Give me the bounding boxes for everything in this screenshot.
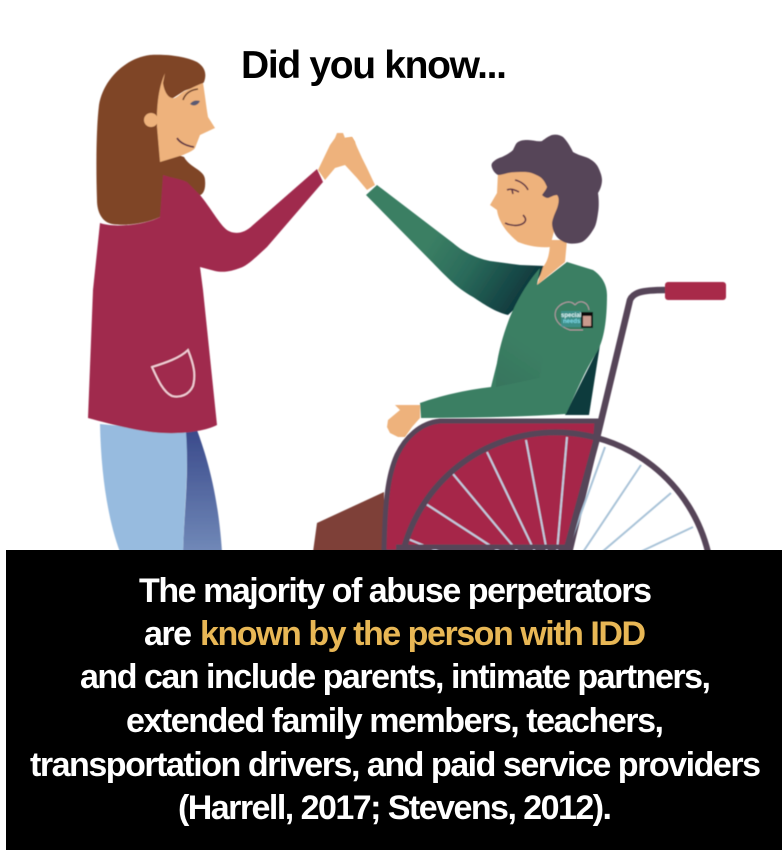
woman hand — [318, 133, 355, 180]
man raised hand — [338, 137, 375, 190]
handle — [665, 282, 726, 300]
illustration: woman — [88, 55, 355, 552]
man ear — [549, 195, 563, 209]
wheel spokes — [408, 437, 693, 552]
body text line 2: are — [144, 615, 192, 653]
citation line: (Harrell, 2017; Stevens, 2012). — [178, 789, 612, 827]
man facial features — [505, 180, 528, 225]
body text line 2 — [144, 615, 646, 653]
woman trousers — [100, 424, 222, 552]
illustration: wheelchair — [313, 282, 726, 552]
man head — [490, 172, 562, 247]
man arm crease — [496, 317, 545, 387]
man hair — [492, 135, 602, 244]
woman pocket — [152, 350, 194, 397]
illustration: man — [338, 135, 607, 437]
man neck — [537, 240, 567, 285]
wheel rim — [403, 432, 708, 552]
logo badge — [555, 302, 593, 330]
woman sweater — [88, 169, 323, 433]
seat — [384, 421, 597, 552]
man torso — [420, 262, 607, 418]
man lower hand — [387, 405, 420, 437]
highlighted phrase: known by the person with IDD — [200, 615, 646, 653]
body text line 5: transportation drivers, and paid service providers — [30, 746, 761, 784]
woman face — [144, 73, 215, 162]
black text panel — [6, 550, 782, 850]
body text line 3: and can include parents, intimate partners, — [80, 658, 711, 696]
seat base bar — [396, 544, 566, 550]
logo badge: needs — [563, 319, 581, 325]
logo badge: special — [561, 313, 582, 319]
body text line 4: extended family members, teachers, — [126, 702, 664, 740]
woman hair — [96, 55, 205, 225]
man back shadow — [565, 345, 600, 415]
chair frame — [566, 290, 666, 552]
man arm — [366, 185, 545, 315]
body text line 1: The majority of abuse perpetrators — [139, 572, 652, 610]
footrest — [313, 492, 384, 552]
title: Did you know... — [241, 44, 507, 87]
